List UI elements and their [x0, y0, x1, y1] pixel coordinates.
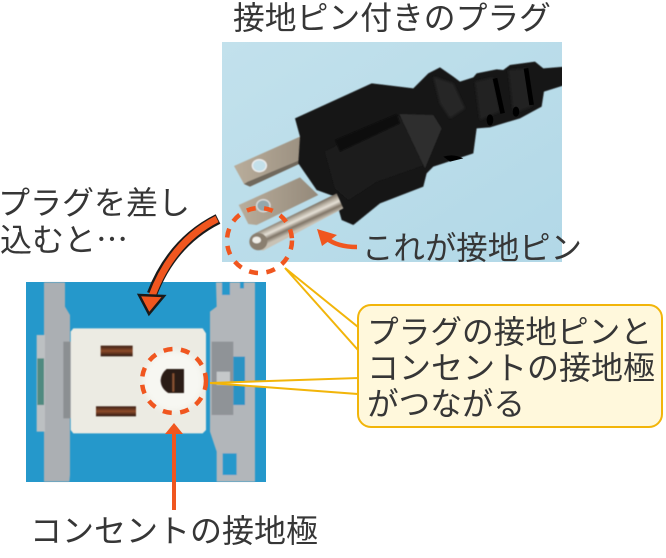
caption: outlet ground: コンセントの接地極 — [30, 513, 318, 549]
title: grounded plug: 接地ピン付きのプラグ — [233, 0, 551, 36]
caption: when plugged in: プラグを差し — [0, 185, 190, 221]
dashed circle: plug ground pin — [227, 208, 292, 273]
callout leader lines — [210, 268, 358, 394]
photo: plug with ground pin — [222, 42, 565, 262]
callout — [358, 305, 662, 427]
ground pin — [249, 193, 343, 251]
callout: プラグの接地ピンと — [367, 314, 652, 350]
ground hole — [161, 369, 184, 393]
label: this is the ground pin: これが接地ピン — [362, 230, 582, 266]
photo: outlet — [26, 282, 266, 482]
caption: when plugged in: 込むと… — [0, 215, 128, 261]
callout: がつながる — [367, 386, 525, 422]
plug body — [295, 62, 565, 225]
caption: when plugged in — [0, 185, 190, 261]
metal frame — [37, 282, 255, 482]
arrow: points at ground pin — [326, 238, 357, 247]
plug blades — [234, 137, 320, 225]
arrow: outlet ground — [165, 423, 183, 510]
callout: コンセントの接地極 — [367, 350, 655, 386]
outlet face — [71, 328, 206, 433]
outlet slots — [96, 346, 136, 416]
arrow: plug into outlet — [139, 219, 218, 314]
dashed circle: outlet ground hole — [142, 349, 206, 413]
